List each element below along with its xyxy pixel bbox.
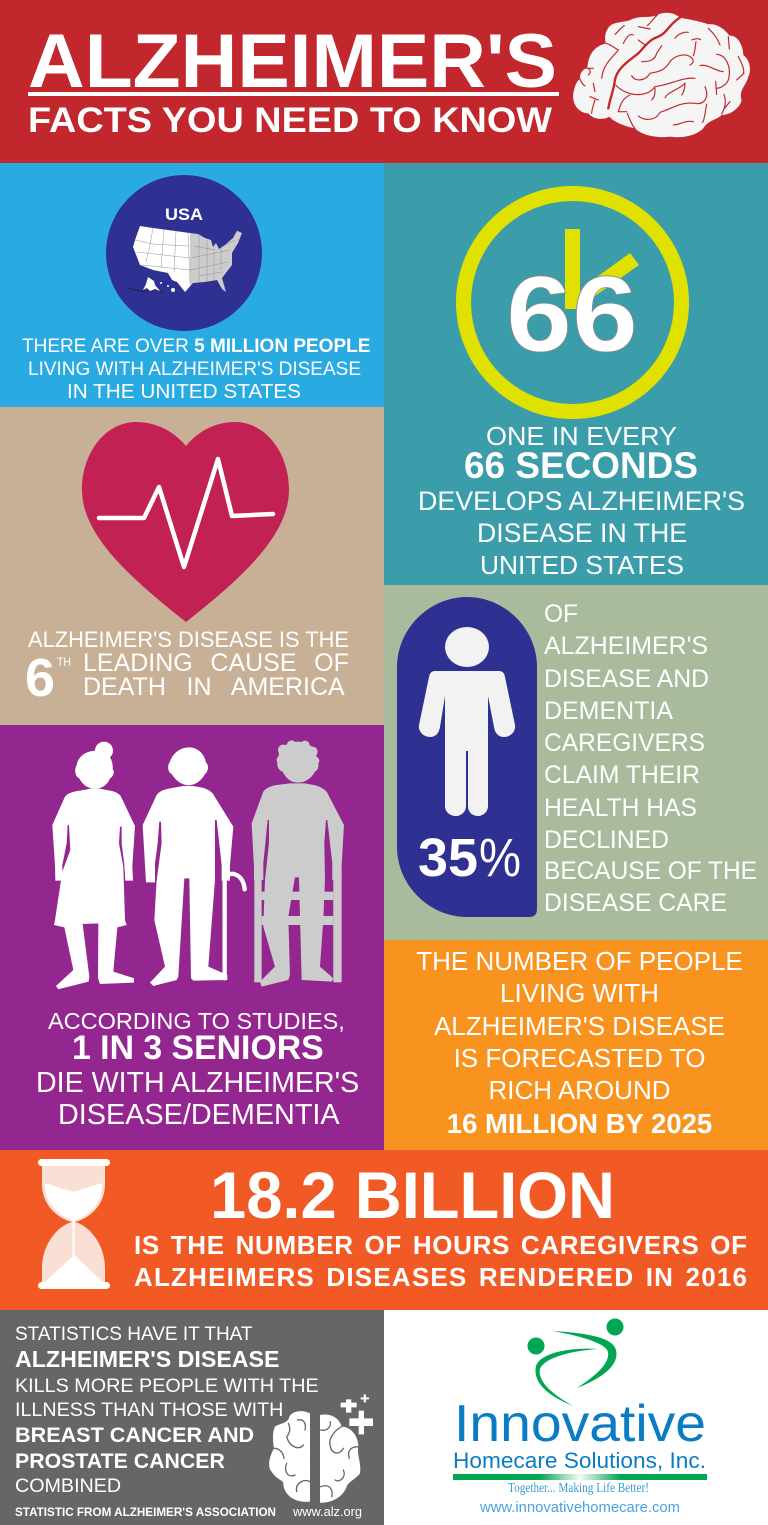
caption: one in every 66 seconds: UNITED STATES bbox=[480, 550, 684, 580]
icon: heart with pulse bbox=[82, 422, 289, 622]
caption: one in every 66 seconds: 66 SECONDS bbox=[464, 445, 698, 486]
caption: 5 million people: THERE ARE OVER 5 MILLION PEOPLE bbox=[22, 336, 370, 357]
icon: clock bbox=[464, 194, 682, 412]
icon: person badge with 35% bbox=[397, 597, 537, 917]
caption: 1 in 3 seniors: 1 IN 3 SENIORS bbox=[72, 1029, 324, 1067]
text: statistics block: ALZHEIMER'S DISEASE bbox=[15, 1346, 279, 1372]
icon: three seniors bbox=[52, 740, 344, 989]
caption: 6th leading cause bbox=[25, 627, 349, 708]
caption: caregivers claim: DECLINED bbox=[544, 826, 669, 854]
caption: forecast text: THE NUMBER OF PEOPLE bbox=[416, 946, 743, 976]
caption: 1 in 3 seniors: DISEASE/DEMENTIA bbox=[58, 1099, 340, 1131]
caption: forecast text: 16 MILLION BY 2025 bbox=[447, 1108, 712, 1139]
caption: 1 in 3 seniors bbox=[36, 1008, 359, 1131]
text: statistics block bbox=[15, 1324, 319, 1497]
icon: woman with walker bbox=[252, 740, 344, 987]
caption: caregiver hours bbox=[134, 1230, 747, 1292]
caption: caregivers claim bbox=[544, 600, 757, 917]
caption: caregivers claim: BECAUSE OF THE bbox=[544, 857, 757, 885]
logo tagline: Together... Making Life Better! bbox=[508, 1480, 649, 1495]
caption: one in every 66 seconds: ONE IN EVERY bbox=[486, 423, 677, 451]
caption: caregivers claim: HEALTH HAS bbox=[544, 794, 697, 822]
text: statistics block: STATISTICS HAVE IT THAT bbox=[15, 1324, 253, 1345]
caption: 6th leading cause: 6 bbox=[25, 648, 55, 708]
icon: man with cane bbox=[143, 747, 245, 986]
panel: 18.2 billion hours bbox=[0, 1150, 768, 1310]
caption: 1 in 3 seniors: DIE WITH ALZHEIMER'S bbox=[36, 1067, 359, 1099]
caption: 5 million people bbox=[22, 336, 370, 403]
caption: 1 in 3 seniors: ACCORDING TO STUDIES, bbox=[48, 1008, 345, 1034]
icon: woman bbox=[52, 742, 135, 989]
icon: brain with plus signs bbox=[269, 1394, 373, 1503]
caption: caregivers claim: DISEASE CARE bbox=[544, 889, 727, 917]
caption: caregivers claim: OF bbox=[544, 600, 578, 628]
panel: 16 million forecast bbox=[384, 940, 768, 1150]
caption: 6th leading cause: DEATH IN AMERICA bbox=[83, 673, 345, 701]
icon: USA map badge bbox=[106, 175, 262, 331]
source url: www.alz.org bbox=[292, 1504, 362, 1519]
text: statistics block: ILLNESS THAN THOSE WITH bbox=[15, 1399, 283, 1421]
logo subtitle: Homecare Solutions, Inc. bbox=[453, 1448, 706, 1473]
icon: logo swoosh bbox=[528, 1318, 624, 1406]
caption: caregivers claim: ALZHEIMER'S bbox=[544, 632, 708, 660]
caption: forecast text: LIVING WITH bbox=[500, 978, 659, 1008]
source line: STATISTIC FROM ALZHEIMER'S ASSOCIATION bbox=[15, 1507, 276, 1519]
caption: forecast text: IS FORECASTED TO bbox=[454, 1043, 705, 1073]
caption: caregivers claim: DEMENTIA bbox=[544, 697, 673, 725]
caption: 6th leading cause: LEADING CAUSE OF bbox=[83, 649, 349, 677]
caption: forecast text: RICH AROUND bbox=[488, 1075, 671, 1105]
icon: clock: 66 bbox=[506, 253, 638, 374]
caption: forecast text: ALZHEIMER'S DISEASE bbox=[434, 1011, 725, 1041]
caption: caregiver hours: ALZHEIMERS DISEASES RENDERED IN 2016 bbox=[134, 1262, 747, 1292]
icon: person badge with 35%: % bbox=[479, 828, 521, 888]
caption: caregivers claim: CLAIM THEIR bbox=[544, 761, 700, 789]
caption: 6th leading cause: ALZHEIMER'S DISEASE IS THE bbox=[28, 627, 349, 652]
panel: statistics bbox=[0, 1310, 384, 1525]
caption: 6th leading cause: TH bbox=[57, 655, 71, 669]
text: statistics block: BREAST CANCER AND bbox=[15, 1422, 254, 1447]
caption: caregiver hours: IS THE NUMBER OF HOURS CAREGIVERS OF bbox=[134, 1230, 747, 1260]
caption: 5 million people: LIVING WITH ALZHEIMER'S DISEASE bbox=[28, 359, 361, 380]
caption: 5 million people: IN THE UNITED STATES bbox=[67, 381, 301, 403]
subtitle: FACTS YOU NEED TO KNOW bbox=[28, 101, 552, 140]
website url: www.innovativehomecare.com bbox=[479, 1499, 680, 1516]
caption: caregivers claim: DISEASE AND bbox=[544, 665, 709, 693]
panel: header bbox=[0, 0, 768, 163]
panel: 66 seconds bbox=[384, 163, 768, 585]
panel: USA population bbox=[0, 163, 384, 407]
icon: USA map badge: USA bbox=[165, 206, 203, 224]
panel: logo bbox=[384, 1310, 768, 1525]
icon: person badge with 35%: 35 bbox=[418, 828, 478, 888]
caption: one in every 66 seconds bbox=[418, 423, 745, 580]
text: statistics block: KILLS MORE PEOPLE WITH THE bbox=[15, 1375, 319, 1397]
text: statistics block: PROSTATE CANCER bbox=[15, 1449, 225, 1473]
caption: one in every 66 seconds: DEVELOPS ALZHEIMER'S bbox=[418, 486, 745, 516]
caption: caregivers claim: CAREGIVERS bbox=[544, 729, 705, 757]
headline: 18.2 billion: 18.2 BILLION bbox=[210, 1158, 615, 1232]
logo wordmark: Innovative bbox=[454, 1395, 706, 1453]
icon: hourglass bbox=[38, 1159, 110, 1289]
caption: one in every 66 seconds: DISEASE IN THE bbox=[477, 518, 687, 548]
panel: seniors bbox=[0, 725, 384, 1150]
caption: forecast text bbox=[416, 946, 743, 1139]
panel: leading cause of death bbox=[0, 407, 384, 725]
title: ALZHEIMER'S bbox=[28, 19, 557, 104]
icon: brain bbox=[573, 13, 750, 137]
text: statistics block: COMBINED bbox=[15, 1475, 121, 1497]
panel: caregivers health bbox=[384, 585, 768, 940]
